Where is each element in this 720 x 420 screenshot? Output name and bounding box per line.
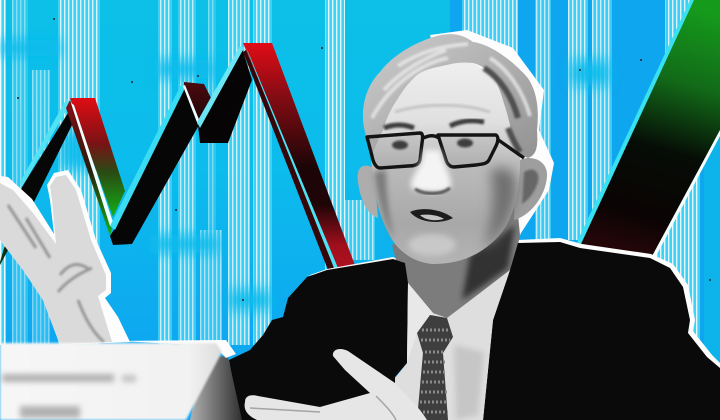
main peak dark strip (243, 50, 337, 270)
first peak side strip (66, 100, 112, 236)
line chart: zig-zag ribbon arrow (0, 43, 356, 270)
shirt (395, 270, 510, 420)
chin highlight (408, 234, 456, 256)
name placard (0, 340, 242, 420)
neck (392, 195, 520, 325)
eyebrows (384, 121, 484, 128)
hair highlights (372, 44, 530, 118)
hand shape (0, 175, 112, 344)
white placard edge (120, 340, 236, 358)
ribbon segment: main peak (243, 43, 356, 268)
placard front (0, 343, 222, 420)
right hand (245, 349, 427, 420)
suit jacket right (483, 242, 720, 420)
suit jacket left (229, 259, 408, 420)
ribbon segment: lower left rise (0, 113, 72, 265)
main peak cyan strip (246, 48, 338, 268)
nostril shadow (415, 188, 450, 193)
first peak highlight (71, 103, 113, 226)
soft cyan clouding across the stripes (0, 40, 610, 310)
finger shading (8, 205, 104, 342)
white cutout outline (430, 30, 720, 420)
right ear (514, 158, 547, 220)
raised left hand (0, 170, 130, 345)
cyan edge (110, 81, 186, 230)
ribbon segment: third rise (198, 48, 252, 143)
neck shadow (462, 225, 515, 300)
paper specks (17, 18, 711, 301)
large green rising arrow band (577, 0, 720, 258)
forehead crease (395, 105, 490, 112)
collar shadow (407, 283, 433, 363)
ribbon segment: second rise (110, 87, 199, 245)
hair (363, 34, 538, 158)
left ear (358, 166, 378, 218)
eyes (392, 138, 473, 150)
second peak highlight (183, 85, 200, 125)
ribbon segment: first peak (70, 98, 125, 217)
mouth (410, 209, 453, 222)
teeth (420, 215, 444, 220)
white hand outline (0, 170, 130, 345)
finger crease (250, 396, 396, 420)
nose (411, 150, 451, 192)
face (366, 61, 520, 264)
glasses (367, 133, 524, 168)
person: speaker in dark suit (229, 30, 720, 420)
cyan edge (197, 46, 244, 128)
jacket top edge (307, 257, 405, 276)
ribbon segment: second peak (184, 82, 211, 125)
cheek shadow right (484, 168, 516, 250)
cheek shadow left (374, 170, 394, 240)
hair shadow (484, 68, 520, 152)
placard side (190, 355, 242, 420)
tie weave (419, 330, 450, 412)
blurred placard lettering (2, 374, 136, 418)
white edge (651, 130, 720, 258)
shirt shadow (454, 345, 484, 420)
right ear inner shadow (522, 170, 538, 204)
necktie (417, 315, 453, 420)
cyan edge (577, 0, 694, 244)
cyan edge (20, 98, 70, 187)
